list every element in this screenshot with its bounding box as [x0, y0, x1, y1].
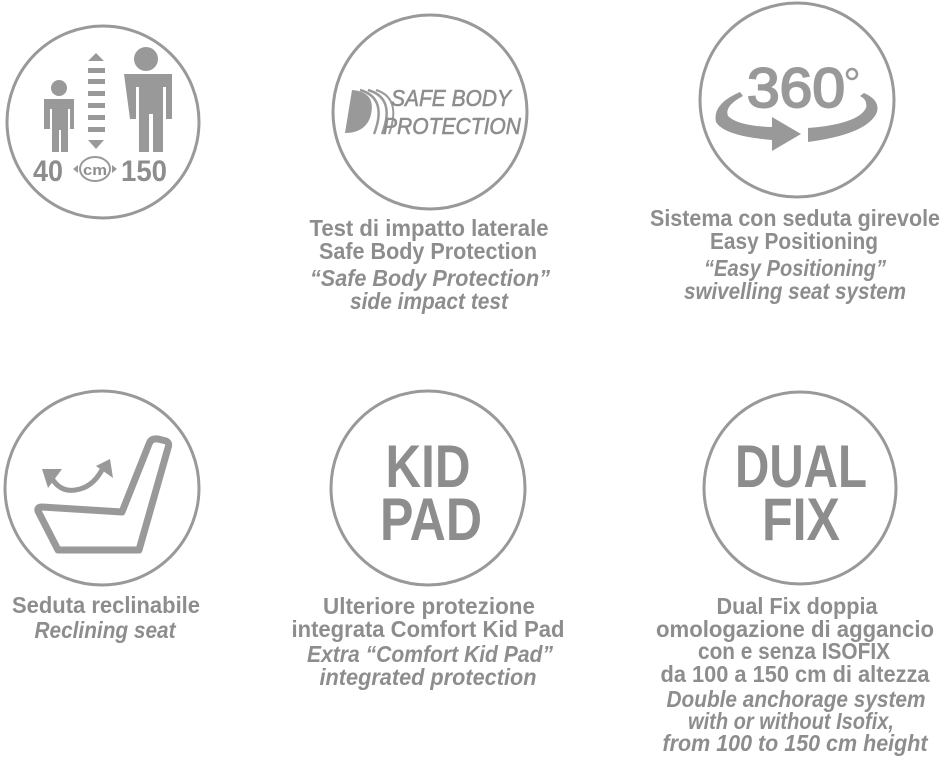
- text: caption dual fix: from 100 to 150 cm height: [662, 730, 929, 756]
- text: SAFE BODY PROTECTION logo: [383, 85, 521, 139]
- text: caption kid pad: integrated protection: [320, 664, 536, 690]
- text: caption 360: [650, 205, 940, 304]
- panel: safe body protection: [310, 15, 550, 314]
- text: caption reclining: [12, 592, 200, 643]
- panel: dual fix: [656, 392, 934, 756]
- text: caption dual fix: with or without Isofix,: [688, 708, 894, 734]
- icon circle: reclining: [5, 391, 199, 585]
- panel: kid pad: [292, 391, 564, 690]
- icon: child figure: [44, 80, 74, 152]
- text: DUAL FIX: [735, 433, 867, 553]
- panel: height range: [7, 26, 199, 218]
- icon circle: kid pad: [331, 391, 525, 585]
- icon circle: 360: [700, 3, 894, 197]
- text: caption dual fix: con e senza ISOFIX: [698, 638, 891, 664]
- text: caption kid pad: [292, 593, 564, 690]
- text: caption safe body: Safe Body Protection: [319, 238, 537, 264]
- icon: recline arrow: [42, 459, 113, 490]
- text: 40 cm 150: cm: [83, 162, 107, 179]
- text: SAFE BODY PROTECTION logo: SAFE BODY: [391, 85, 513, 111]
- text: caption 360: swivelling seat system: [684, 278, 906, 304]
- panel: reclining seat: [5, 391, 200, 643]
- icon circle: height: [7, 26, 199, 218]
- text: caption safe body: [310, 215, 550, 314]
- icon circle: dual fix: [704, 392, 896, 584]
- text: KID PAD: PAD: [380, 486, 482, 553]
- text: 40 cm 150: 40: [33, 155, 63, 188]
- panel: 360 swivel: [650, 3, 940, 304]
- text: KID PAD: [380, 433, 482, 553]
- text: DUAL FIX: DUAL: [735, 433, 867, 500]
- text: caption dual fix: da 100 a 150 cm di altezza: [660, 661, 930, 687]
- text: caption safe body: Test di impatto laterale: [310, 215, 548, 241]
- text: 40 cm 150: [33, 155, 167, 188]
- text: caption dual fix: Dual Fix doppia: [716, 593, 878, 619]
- icon: D wave logo: [345, 90, 393, 134]
- text: caption reclining: Seduta reclinabile: [12, 592, 200, 618]
- text: caption dual fix: omologazione di aggancio: [656, 616, 934, 642]
- text: KID PAD: KID: [386, 433, 470, 500]
- text: caption kid pad: integrata Comfort Kid Pad: [292, 616, 564, 642]
- text: DUAL FIX: FIX: [762, 486, 840, 553]
- icon: rotation arrow: [716, 92, 877, 151]
- text: caption reclining: Reclining seat: [34, 617, 177, 643]
- text: caption kid pad: Ulteriore protezione: [323, 593, 535, 619]
- text: caption safe body: side impact test: [350, 288, 509, 314]
- text: caption 360: Easy Positioning: [710, 228, 878, 254]
- icon: dashed height arrow: [88, 53, 105, 149]
- icon: seat outline: [38, 439, 169, 550]
- text: caption 360: “Easy Positioning”: [704, 255, 886, 281]
- icon circle: safe body: [333, 15, 527, 209]
- text: caption kid pad: Extra “Comfort Kid Pad”: [307, 641, 553, 667]
- text: 40 cm 150: 150: [121, 155, 167, 188]
- text: caption dual fix: [656, 593, 934, 756]
- text: SAFE BODY PROTECTION logo: PROTECTION: [383, 113, 521, 139]
- text: 360°: 360: [747, 56, 845, 119]
- text: caption safe body: “Safe Body Protection”: [310, 265, 550, 291]
- icon: adult figure: [124, 47, 172, 152]
